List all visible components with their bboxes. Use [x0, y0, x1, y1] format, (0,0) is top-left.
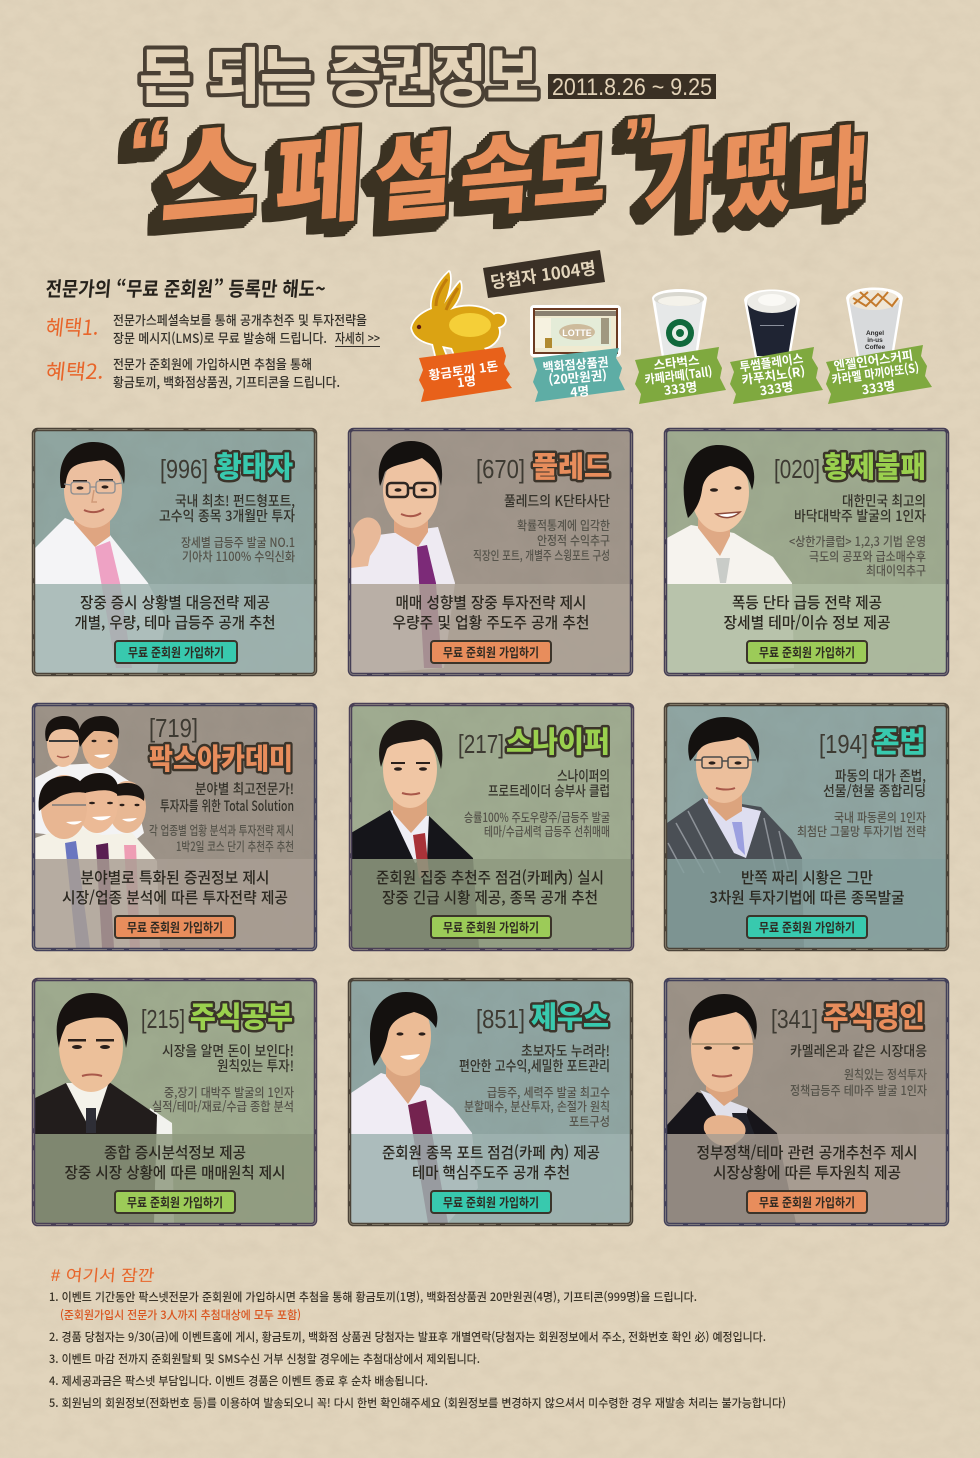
- prize: department store voucher: [530, 305, 621, 357]
- description: 대한민국 최고의: [842, 491, 926, 511]
- main title: 스페셜속보 가 떴다: 속: [457, 104, 538, 236]
- description: 기아차 1100% 수익신화: [182, 546, 295, 565]
- description: 직장인 포트, 개별주 스윙포트 구성: [473, 545, 610, 564]
- benefit 2 text: [113, 354, 340, 391]
- notes heading: # 여기서 잠깐: [50, 1262, 156, 1286]
- service summary: 장세별 테마/이슈 정보 제공: [724, 611, 890, 633]
- prize ribbon: rabbit: [419, 347, 512, 402]
- service summary: 시장/업종 분석에 따른 투자전략 제공: [62, 886, 288, 908]
- expert name: 스나이퍼: [506, 719, 610, 761]
- main title: 스페셜속보 가 떴다: “: [124, 100, 172, 205]
- portrait: [351, 720, 479, 948]
- join button: 무료 준회원 가입하기: [443, 1192, 539, 1211]
- description: 테마/수급세력 급등주 선취매매: [484, 821, 610, 840]
- service summary: 반쪽 짜리 시황은 그만: [741, 866, 873, 888]
- service summary: 준회원 집중 추천주 점검(카페內) 실시: [376, 866, 604, 888]
- service summary: [64, 1141, 286, 1183]
- prize ribbon: angel-in-us: 333명: [860, 375, 896, 398]
- description: 승률100% 주도우량주/급등주 발굴: [464, 807, 610, 826]
- description: 각 업종별 업황 분석과 투자전략 제시: [149, 820, 294, 839]
- prize ribbon: starbucks: 스타벅스: [652, 349, 700, 374]
- description: <상한가클럽> 1,2,3 기법 운영: [789, 531, 926, 550]
- description: 고수익 종목 3개월만 투자: [159, 506, 295, 526]
- notes list: 2. 경품 당첨자는 9/30(금)에 이벤트홈에 게시, 황금토끼, 백화점 상품권 당첨자는 발표후 개별연락(당첨자는 회원정보에서 주소, 전화번호 확인 必) 예정입니다.: [49, 1329, 766, 1345]
- main title: 스페셜속보 가 떴다: ”: [620, 102, 657, 184]
- main title: 스페셜속보 가 떴다: 다: [793, 96, 862, 232]
- join button: 무료 준회원 가입하기: [443, 642, 539, 661]
- lower overlay: [352, 859, 631, 948]
- prize: starbucks cup: [652, 289, 707, 358]
- prize ribbon: starbucks: 333명: [662, 376, 698, 399]
- benefit 1 label: 혜택1.: [44, 312, 100, 342]
- service summary: [74, 591, 276, 633]
- benefit 1 text: 전문가스페셜속보를 통해 공개추천주 및 투자전략을: [113, 310, 367, 329]
- main title: 스페셜속보 가 떴다: [121, 48, 873, 267]
- description: 분할매수, 분산투자, 손절가 원칙: [464, 1096, 610, 1115]
- description: 확률적통계에 입각한: [517, 515, 610, 534]
- join button: 무료 준회원 가입하기: [759, 642, 855, 661]
- prize ribbon: twosome: 투썸플레이스: [738, 348, 804, 375]
- prize: angel-in-us cup: Angel: [866, 330, 884, 337]
- description: 시장을 알면 돈이 보인다!: [162, 1041, 294, 1061]
- description: [459, 1041, 610, 1130]
- description: 선물/현물 종합리딩: [823, 781, 926, 801]
- description: 초보자도 누려라!: [521, 1041, 610, 1061]
- description: [473, 491, 610, 564]
- portrait: [667, 445, 794, 673]
- portrait: [351, 441, 455, 673]
- portrait: [667, 717, 804, 948]
- main title: 스페셜속보 가 떴다: 페: [272, 94, 366, 248]
- expert name: 풀레드: [532, 444, 610, 486]
- lower overlay: [351, 584, 630, 673]
- panel border: [666, 430, 948, 674]
- description: 안정적 수익추구: [537, 530, 610, 549]
- main title: 스페셜속보 가 떴다: !: [844, 114, 872, 221]
- prize: department store voucher: LOTTE: [562, 328, 592, 338]
- description: 투자자를 위한 Total Solution: [160, 796, 294, 816]
- prize ribbon: angel-in-us: [826, 345, 932, 404]
- notes list: 4. 제세공과금은 팍스넷 부담입니다. 이벤트 경품은 이벤트 종료 후 순차 배송됩니다.: [49, 1373, 428, 1389]
- portrait: [351, 992, 478, 1223]
- expert name: 팍스아카데미: [149, 736, 293, 778]
- service summary: 3차원 투자기법에 따른 종목발굴: [710, 886, 904, 908]
- benefit 2: [44, 354, 340, 391]
- prize ribbon: rabbit: 황금토끼 1돈: [427, 355, 499, 384]
- description: 바닥대박주 발굴의 1인자: [794, 506, 926, 526]
- description: 분야별 최고전문가!: [195, 779, 294, 799]
- description: 풀레드의 K단타사단: [504, 491, 610, 511]
- description: 극도의 공포와 급소매수후: [809, 546, 926, 565]
- service summary: [724, 591, 890, 633]
- join button: 무료 준회원 가입하기: [443, 917, 539, 936]
- description: [152, 1041, 294, 1115]
- lower overlay: [35, 859, 314, 948]
- number: [215]: [141, 1004, 185, 1034]
- main title: 스페셜속보 가 떴다: 가: [642, 98, 717, 245]
- description: 원칙있는 정석투자: [844, 1064, 927, 1083]
- subtitle: 돈 되는 증권정보: 돈 되는 증권정보: [139, 29, 539, 116]
- prize ribbon: voucher: (20만원권): [547, 364, 608, 389]
- description: [149, 779, 294, 855]
- date badge: 2011.8.26 ~ 9.25: [552, 74, 712, 101]
- panel border: [350, 704, 632, 950]
- panel border: [34, 430, 316, 674]
- description: 최대이익추구: [866, 560, 926, 579]
- description: 스나이퍼의: [557, 766, 610, 786]
- service summary: [382, 1141, 600, 1183]
- panel: 341 주식명인: [666, 980, 948, 1224]
- description: 카멜레온과 같은 시장대응: [790, 1041, 927, 1061]
- panel border: [666, 980, 948, 1224]
- expert name: 주식공부: [190, 994, 293, 1036]
- description: 국내 최초! 펀드형포트,: [175, 491, 295, 511]
- panel border: [34, 980, 316, 1224]
- benefit 2 text: 전문가 준회원에 가입하시면 추첨을 통해: [113, 354, 312, 373]
- portrait: [667, 994, 796, 1223]
- description: 프로트레이더 승부사 클럽: [488, 781, 610, 801]
- service summary: 분야별로 특화된 증권정보 제시: [80, 866, 270, 888]
- description: 장세별 급등주 발굴 NO.1: [181, 532, 295, 551]
- join button: 무료 준회원 가입하기: [759, 917, 855, 936]
- service summary: [376, 866, 604, 908]
- description: [789, 491, 926, 579]
- main title: 스페셜속보 가 떴다: 셜: [370, 99, 457, 241]
- service summary: [696, 1141, 918, 1183]
- join button: 무료 준회원 가입하기: [128, 642, 224, 661]
- panel: 020 황제불패: [666, 430, 948, 674]
- prize: angel-in-us cup: in-us: [867, 337, 883, 344]
- description: 파동의 대가 존법,: [835, 766, 926, 786]
- portrait: [35, 993, 174, 1223]
- prize ribbon: starbucks: 카페라떼(Tall): [643, 361, 713, 388]
- expert name: 주식명인: [823, 994, 925, 1036]
- lower overlay: [667, 1134, 946, 1223]
- prize ribbon: angel-in-us: 엔젤인어스커피: [832, 345, 914, 375]
- notes list: (준회원가입시 전문가 3人까지 추첨대상에 모두 포함): [60, 1307, 301, 1323]
- benefit 1 text: 장문 메시지(LMS)로 무료 발송해 드립니다.: [113, 328, 327, 347]
- winners badge: 당첨자 1004명: [489, 254, 597, 293]
- panel: 215 주식공부: [34, 980, 316, 1224]
- lower overlay: [35, 584, 314, 673]
- service summary: 종합 증시분석정보 제공: [104, 1141, 246, 1163]
- description: 급등주, 세력주 발굴 최고수: [487, 1082, 610, 1101]
- panel: 996 황태자: [34, 430, 316, 674]
- panel: 851 제우스: [350, 980, 632, 1224]
- prize ribbon: rabbit: 1명: [456, 370, 477, 391]
- service summary: 폭등 단타 급등 전략 제공: [732, 591, 882, 613]
- service summary: [62, 866, 288, 908]
- join button: 무료 준회원 가입하기: [127, 917, 223, 936]
- notes list: 3. 이벤트 마감 전까지 준회원탈퇴 및 SMS수신 거부 신청할 경우에는 추첨대상에서 제외됩니다.: [49, 1351, 480, 1367]
- prize ribbon: angel-in-us: 카라멜 마끼아또(S): [830, 357, 920, 388]
- description: 편안한 고수익,세밀한 포트관리: [459, 1056, 610, 1076]
- portrait group: [35, 716, 160, 948]
- main title: 스페셜속보 가 떴다: 떴: [721, 97, 794, 238]
- main title: 스페셜속보 가 떴다: 보: [531, 101, 610, 231]
- prize ribbon: starbucks: [635, 347, 726, 404]
- prize: golden rabbit: [412, 272, 505, 358]
- panel: 719 팍스아카데미: [34, 704, 316, 950]
- notes list: [49, 1289, 786, 1411]
- service summary: 준회원 종목 포트 점검(카페 內) 제공: [382, 1141, 600, 1163]
- benefit 2 label: 혜택2.: [44, 356, 105, 386]
- prize ribbon: voucher: 4명: [569, 380, 590, 401]
- description: [790, 1041, 927, 1099]
- prize ribbon: voucher: 백화점상품권: [542, 351, 609, 376]
- expert name: 존법: [873, 719, 926, 761]
- description: 중,장기 대박주 발굴의 1인자: [164, 1082, 294, 1101]
- lower overlay: [667, 859, 946, 948]
- number: [996]: [160, 454, 208, 484]
- lower overlay: [667, 584, 946, 673]
- number: [670]: [476, 454, 525, 484]
- prize: angel-in-us cup: Coffee: [865, 344, 885, 351]
- prize ribbon: twosome: 카푸치노(R): [740, 361, 806, 388]
- panel border: [350, 980, 632, 1224]
- description: 포트구성: [569, 1111, 610, 1130]
- service summary: 장중 증시 상황별 대응전략 제공: [80, 591, 270, 613]
- description: 원칙있는 투자!: [217, 1056, 294, 1076]
- panel border: [34, 704, 316, 950]
- join button: 무료 준회원 가입하기: [127, 1192, 223, 1211]
- lower overlay: [351, 1134, 630, 1223]
- service summary: 시장상황에 따른 투자원칙 제공: [713, 1161, 901, 1183]
- service summary: 장중 시장 상황에 따른 매매원칙 제시: [64, 1161, 286, 1183]
- service summary: 매매 성향별 장중 투자전략 제시: [396, 591, 586, 613]
- prize: twosome cup: [744, 290, 800, 358]
- panel border: [666, 704, 948, 950]
- expert name: 제우스: [531, 994, 609, 1036]
- main title: 스페셜속보 가 떴다: 스: [157, 83, 263, 255]
- service summary: 정부정책/테마 관련 공개추천주 제시: [696, 1141, 918, 1163]
- prize ribbon: twosome: 333명: [758, 376, 794, 399]
- service summary: [392, 591, 590, 633]
- description: [464, 766, 610, 840]
- portrait: [35, 442, 166, 673]
- intro heading: 전문가의 “무료 준회원” 등록만 해도~: [44, 273, 327, 302]
- prize: angel-in-us cup: [846, 288, 903, 358]
- benefit 2 text: 황금토끼, 백화점상품권, 기프티콘을 드립니다.: [113, 372, 340, 391]
- panel: 670 풀레드: [350, 430, 632, 674]
- notes list: 1. 이벤트 기간동안 팍스넷전문가 준회원에 가입하시면 추첨을 통해 황금토끼(1명), 백화점상품권 20만원권(4명), 기프티콘(999명)을 드립니다.: [49, 1289, 697, 1305]
- description: 최첨단 그물망 투자기법 전략: [797, 821, 926, 840]
- panel border: [350, 430, 632, 674]
- panel: 217 스나이퍼: [350, 704, 632, 950]
- service summary: 우량주 및 업황 주도주 공개 추천: [392, 611, 590, 633]
- service summary: [710, 866, 904, 908]
- lower overlay: [35, 1134, 314, 1223]
- panel: 194 존법: [666, 704, 948, 950]
- description: [159, 491, 295, 565]
- benefit 1 text: [113, 310, 367, 347]
- description: 정책급등주 테마주 발굴 1인자: [790, 1080, 927, 1099]
- service summary: 테마 핵심주도주 공개 추천: [412, 1161, 570, 1183]
- number: [719]: [149, 713, 198, 743]
- description: [797, 766, 926, 840]
- more link: 자세히 >>: [335, 328, 380, 347]
- description: 1박2일 코스 단기 추천주 추천: [176, 836, 294, 855]
- benefit 1: [44, 310, 380, 347]
- description: 국내 파동론의 1인자: [834, 807, 926, 826]
- number: [194]: [819, 729, 868, 759]
- number: [020]: [774, 454, 820, 484]
- number: [341]: [771, 1004, 818, 1034]
- number: [851]: [476, 1004, 525, 1034]
- description: 실적/테마/재료/수급 종합 분석: [152, 1096, 294, 1115]
- service summary: 개별, 우량, 테마 급등주 공개 추천: [74, 611, 276, 633]
- service summary: 장중 긴급 시황 제공, 종목 공개 추천: [382, 886, 598, 908]
- prize ribbon: voucher: [533, 348, 625, 402]
- join button: 무료 준회원 가입하기: [759, 1192, 855, 1211]
- prize ribbon: twosome: [730, 347, 823, 404]
- expert name: 황제불패: [824, 444, 926, 486]
- notes list: 5. 회원님의 회원정보(전화번호 등)를 이용하여 발송되오니 꼭! 다시 한번 확인해주세요 (회원정보를 변경하지 않으셔서 미수령한 경우 재발송 처리는 불가능합니다): [49, 1395, 786, 1411]
- expert name: 황태자: [216, 444, 293, 486]
- number: [217]: [458, 729, 504, 759]
